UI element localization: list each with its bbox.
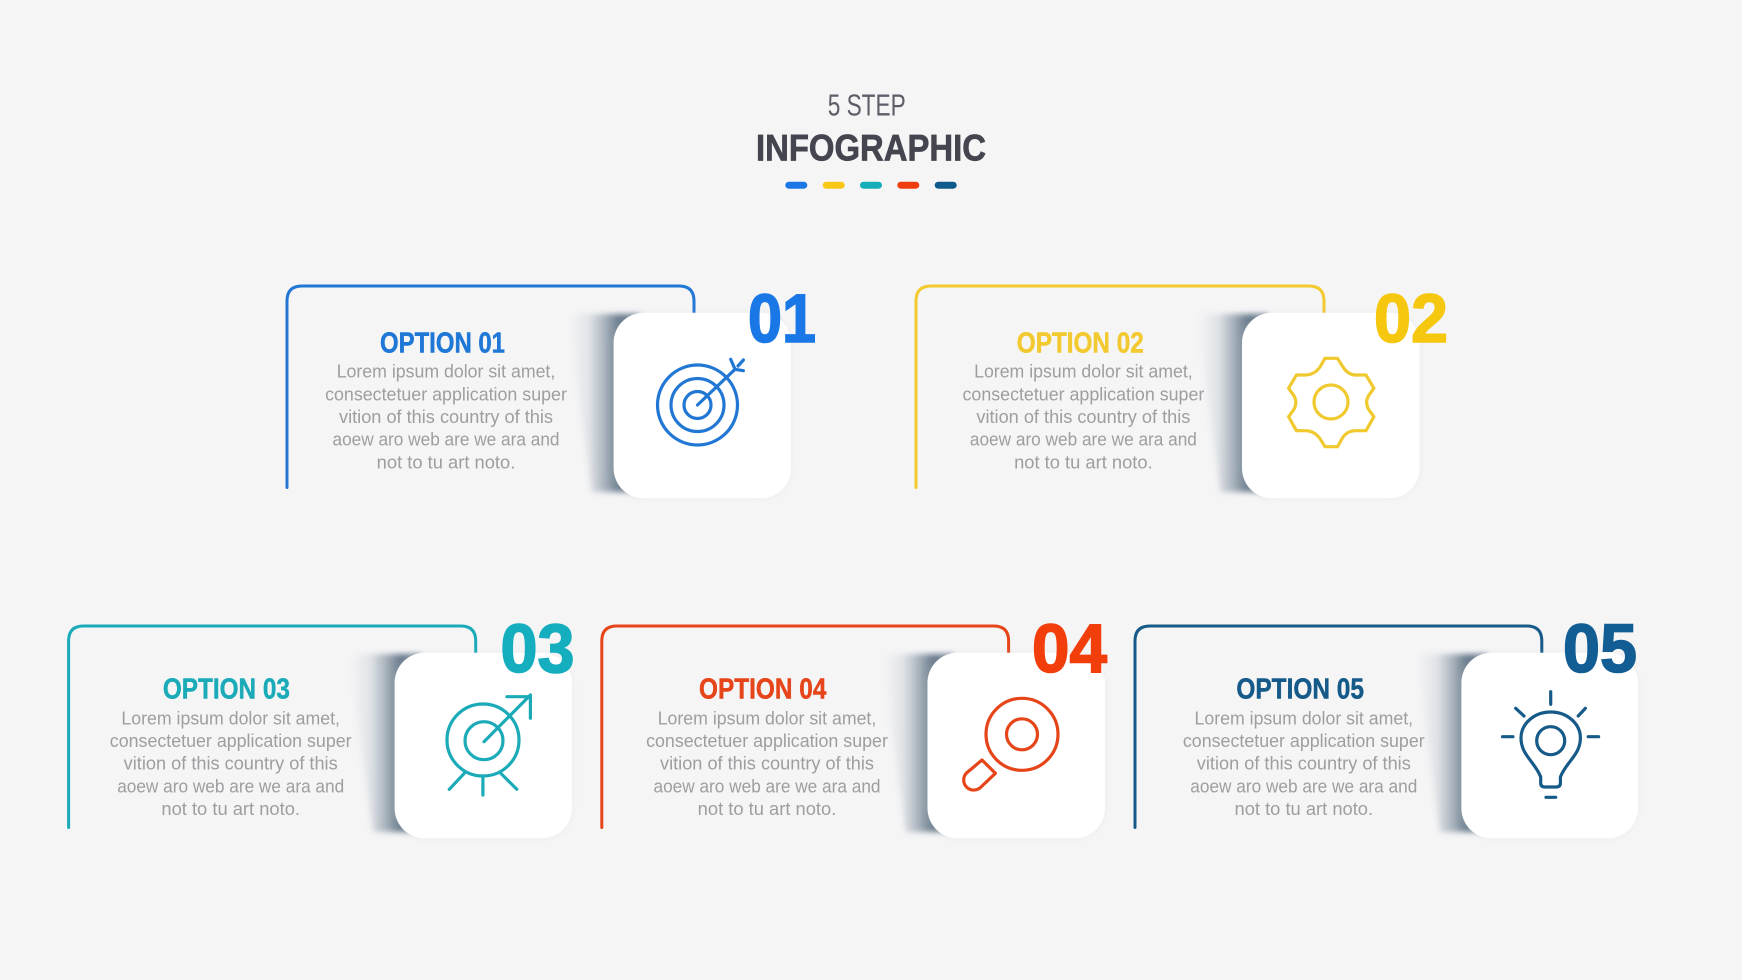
- body text: consectetuer application super: [646, 731, 888, 751]
- body text: vition of this country of this: [660, 754, 874, 774]
- panel: option 01: [287, 280, 816, 498]
- body text: aoew aro web are we ara and: [654, 776, 880, 796]
- body text: Lorem ipsum dolor sit amet,: [121, 708, 340, 728]
- frame line: [602, 626, 1009, 828]
- body text: vition of this country of this: [976, 407, 1190, 427]
- white icon box: [1242, 313, 1420, 498]
- title: infographic: INFOGRAPHIC: [756, 128, 986, 168]
- body text: aoew aro web are we ara and: [117, 776, 344, 796]
- icon: magnifier: [964, 698, 1058, 790]
- body text: aoew aro web are we ara and: [1190, 776, 1417, 796]
- box shadow: [568, 314, 640, 492]
- title: 5 step: 5 STEP: [828, 88, 906, 122]
- body text: consectetuer application super: [962, 384, 1204, 404]
- white icon box: [614, 313, 791, 498]
- box shadow: [882, 654, 954, 832]
- panel: option 02: [916, 280, 1448, 498]
- panel: option 03: [69, 610, 574, 838]
- body text: [110, 708, 352, 819]
- heading: OPTION 01: [380, 328, 505, 360]
- body text: not to tu art noto.: [161, 799, 300, 819]
- panel: option 05: [1135, 610, 1638, 838]
- body text: aoew aro web are we ara and: [332, 430, 560, 450]
- frame line: [916, 286, 1324, 488]
- number 03: 03: [500, 610, 574, 687]
- heading: OPTION 02: [1017, 328, 1144, 360]
- heading: OPTION 03: [163, 674, 290, 706]
- number 02: 02: [1374, 280, 1448, 357]
- box shadow: [1196, 314, 1268, 492]
- body text: aoew aro web are we ara and: [970, 430, 1197, 450]
- body text: [646, 708, 888, 819]
- body text: consectetuer application super: [325, 384, 567, 404]
- number 01: 01: [748, 280, 816, 357]
- icon: gear: [1289, 358, 1374, 447]
- heading: OPTION 04: [699, 674, 826, 706]
- box shadow: [1415, 654, 1487, 832]
- icon: target with arrow and stand: [447, 695, 530, 795]
- body text: [325, 362, 567, 472]
- body text: not to tu art noto.: [1234, 799, 1373, 819]
- white icon box: [395, 653, 572, 838]
- panel: option 04: [602, 610, 1107, 838]
- body text: [962, 362, 1204, 472]
- body text: consectetuer application super: [110, 731, 352, 751]
- frame line: [1135, 626, 1542, 828]
- frame line: [69, 626, 476, 828]
- frame line: [287, 286, 694, 488]
- body text: not to tu art noto.: [698, 799, 836, 819]
- body text: not to tu art noto.: [1014, 452, 1153, 472]
- icon: target with dart: [658, 359, 743, 445]
- title block: [756, 88, 986, 189]
- heading: OPTION 05: [1236, 674, 1364, 706]
- white icon box: [928, 653, 1105, 838]
- body text: Lorem ipsum dolor sit amet,: [658, 708, 876, 728]
- body text: not to tu art noto.: [377, 452, 515, 472]
- white icon box: [1461, 653, 1638, 838]
- number 04: 04: [1032, 610, 1107, 687]
- body text: Lorem ipsum dolor sit amet,: [1194, 708, 1413, 728]
- body text: vition of this country of this: [339, 407, 553, 427]
- icon: light bulb: [1502, 692, 1599, 797]
- body text: Lorem ipsum dolor sit amet,: [974, 362, 1193, 382]
- box shadow: [349, 654, 421, 832]
- body text: vition of this country of this: [1197, 754, 1411, 774]
- body text: [1183, 708, 1425, 819]
- body text: vition of this country of this: [124, 754, 338, 774]
- body text: Lorem ipsum dolor sit amet,: [337, 362, 555, 382]
- number 05: 05: [1563, 610, 1637, 687]
- body text: consectetuer application super: [1183, 731, 1425, 751]
- colour dashes: [785, 182, 957, 189]
